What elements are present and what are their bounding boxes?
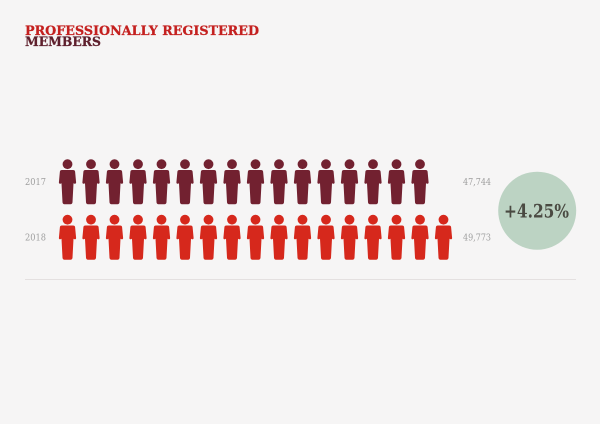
title line 2: MEMBERS [25, 35, 101, 50]
year label 2018: 2018 [25, 234, 46, 244]
value 2018: 49,773 [463, 234, 491, 244]
title [25, 24, 259, 50]
growth percentage: +4.25% [504, 200, 569, 222]
year label 2017: 2017 [25, 178, 46, 188]
value 2017: 47,744 [463, 178, 491, 188]
growth callout circle [498, 172, 576, 250]
pictogram row 2017 [59, 159, 429, 204]
pictogram row 2018 [59, 215, 452, 260]
title line 1: PROFESSIONALLY REGISTERED [25, 24, 259, 39]
